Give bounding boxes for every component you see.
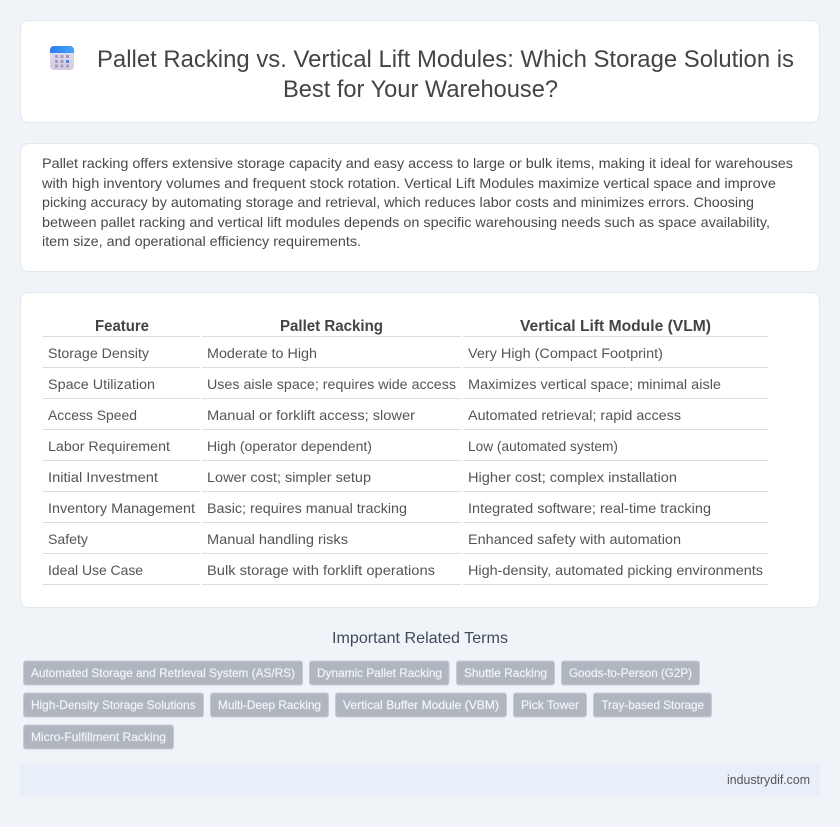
- heading: related terms: Important Related Terms: [332, 630, 508, 647]
- row: inventory management: Inventory Management: [48, 500, 195, 516]
- row: space utilization: Space Utilization: [48, 376, 155, 392]
- row: initial investment: Initial Investment: [48, 469, 158, 485]
- panel: comparison table: [20, 292, 820, 608]
- row: safety: Safety: [48, 531, 88, 547]
- row: ideal use case: High-density, automated picking environments: [468, 562, 763, 578]
- row: initial investment: Lower cost; simpler setup: [207, 469, 371, 485]
- row: ideal use case: [48, 562, 763, 578]
- row: initial investment: Higher cost; complex installation: [468, 469, 677, 485]
- footer bar: [20, 763, 820, 797]
- text block: summary paragraph: item size, and operational efficiency requirements.: [42, 233, 361, 249]
- row: storage density: Storage Density: [48, 345, 149, 361]
- row: space utilization: Maximizes vertical space; minimal aisle: [468, 376, 721, 392]
- panel: related term tags: Goods-to-Person (G2P): [569, 666, 692, 680]
- row: inventory management: Integrated software; real-time tracking: [468, 500, 711, 516]
- panel: related term tags: Shuttle Racking: [464, 666, 547, 680]
- panel: related term tags: Dynamic Pallet Racking: [317, 666, 442, 680]
- row: inventory management: [48, 500, 711, 516]
- panel: related term tags: Tray-based Storage: [602, 698, 704, 712]
- text block: summary paragraph: between pallet racking and vertical lift modules depends on specific warehousing needs such as space availability,: [42, 214, 770, 230]
- table header: Pallet Racking: [280, 318, 383, 335]
- row: storage density: Moderate to High: [207, 345, 317, 361]
- heading: [97, 46, 794, 103]
- row: ideal use case: Bulk storage with forklift operations: [207, 562, 435, 578]
- row: labor requirement: Low (automated system): [468, 438, 618, 454]
- row: storage density: Very High (Compact Footprint): [468, 345, 663, 361]
- row: initial investment: [48, 469, 677, 485]
- row: access speed: Access Speed: [48, 407, 137, 423]
- footer bar: industrydif.com: [727, 773, 810, 787]
- row: access speed: [48, 407, 681, 423]
- panel: related term tags: High-Density Storage Solutions: [31, 698, 196, 712]
- row: labor requirement: [48, 438, 618, 454]
- table header: [95, 318, 711, 335]
- panel: related term tags: [24, 661, 712, 749]
- icon: calendar grid: [50, 46, 74, 70]
- table rules: [43, 336, 768, 584]
- panel: related term tags: Multi-Deep Racking: [218, 698, 321, 712]
- heading: Best for Your Warehouse?: [283, 76, 558, 103]
- text block: summary paragraph: picking accuracy by automating storage and retrieval, which reduces labor costs and minimizes errors. Choosing: [42, 194, 754, 210]
- table header: Feature: [95, 318, 149, 335]
- row: storage density: [48, 345, 663, 361]
- row: safety: Manual handling risks: [207, 531, 348, 547]
- row: access speed: Manual or forklift access; slower: [207, 407, 415, 423]
- row: access speed: Automated retrieval; rapid access: [468, 407, 681, 423]
- panel: related term tags: Micro-Fulfillment Racking: [31, 730, 166, 744]
- row: inventory management: Basic; requires manual tracking: [207, 500, 407, 516]
- text block: summary paragraph: [41, 155, 793, 249]
- panel: related term tags: Automated Storage and Retrieval System (AS/RS): [31, 666, 295, 680]
- text block: summary paragraph: with high inventory volumes and frequent stock rotation. Vertical Lift Modules maximize vertical space and improve: [41, 175, 776, 191]
- text block: summary paragraph: Pallet racking offers extensive storage capacity and easy access to large or bulk items, making it ideal for warehouses: [42, 155, 793, 171]
- row: labor requirement: Labor Requirement: [48, 438, 170, 454]
- row: space utilization: [48, 376, 721, 392]
- row: safety: Enhanced safety with automation: [468, 531, 681, 547]
- panel: related term tags: Vertical Buffer Module (VBM): [343, 698, 499, 712]
- row: labor requirement: High (operator dependent): [207, 438, 372, 454]
- row: space utilization: Uses aisle space; requires wide access: [207, 376, 456, 392]
- table header: Vertical Lift Module (VLM): [520, 318, 711, 335]
- panel: introduction text: [20, 144, 820, 272]
- row: safety: [48, 531, 681, 547]
- heading: Pallet Racking vs. Vertical Lift Modules: Which Storage Solution is: [97, 46, 794, 73]
- panel: title card: [20, 20, 820, 122]
- row: ideal use case: Ideal Use Case: [48, 562, 143, 578]
- panel: related term tags: Pick Tower: [521, 698, 579, 712]
